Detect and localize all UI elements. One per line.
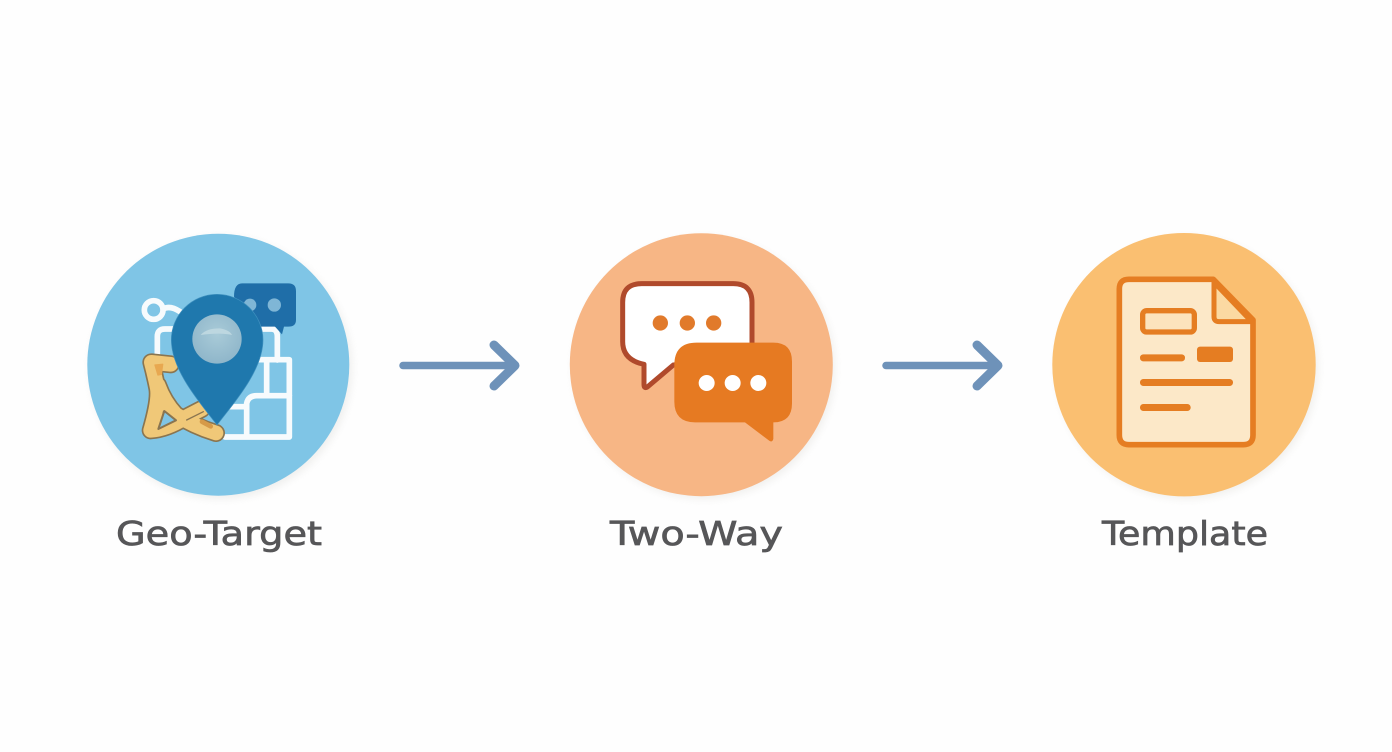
icon: white bubble dots — [653, 315, 721, 331]
label: Template: Template — [1101, 515, 1268, 553]
label: Two-Way: Two-Way — [609, 515, 783, 553]
circle shadow 3 — [1056, 237, 1318, 499]
icon: location pin — [171, 294, 263, 425]
icon: chat bubble dot — [268, 298, 281, 312]
icon: orange speech bubble — [674, 343, 792, 441]
icon: text line 2 — [1140, 379, 1233, 386]
icon: white speech bubble — [623, 284, 752, 388]
arrow 1 — [403, 345, 515, 386]
circle: amber background — [1052, 233, 1316, 496]
icon: chat bubble — [234, 283, 296, 334]
icon: orange bubble dots — [699, 375, 766, 391]
step 2: Two-Way — [570, 233, 835, 499]
icon: folded corner — [1214, 282, 1252, 322]
icon: map pin with map and chat bubble — [144, 283, 296, 437]
circle shadow 1 — [90, 237, 352, 499]
icon: lens highlight — [201, 328, 232, 335]
icon: two speech bubbles — [623, 284, 792, 441]
step 1: Geo-Target — [87, 234, 352, 499]
icon: text line 3 — [1140, 404, 1191, 411]
icon: text line 1 — [1140, 354, 1185, 361]
icon: document page — [1119, 279, 1253, 445]
icon: chat bubble dot — [244, 299, 256, 311]
icon: filled tag — [1197, 347, 1233, 362]
icon: map grid lines — [144, 301, 289, 437]
icon: pin lens — [192, 314, 242, 364]
step 3: Template — [1052, 233, 1318, 499]
icon: header box — [1143, 311, 1194, 332]
arrow 2 — [886, 345, 998, 386]
icon: tan route shape — [151, 362, 216, 433]
label: Geo-Target: Geo-Target — [116, 515, 322, 553]
circle: peach background — [570, 233, 833, 496]
circle shadow 2 — [573, 237, 835, 499]
circle: blue background — [87, 234, 349, 496]
icon: document — [1119, 279, 1253, 445]
